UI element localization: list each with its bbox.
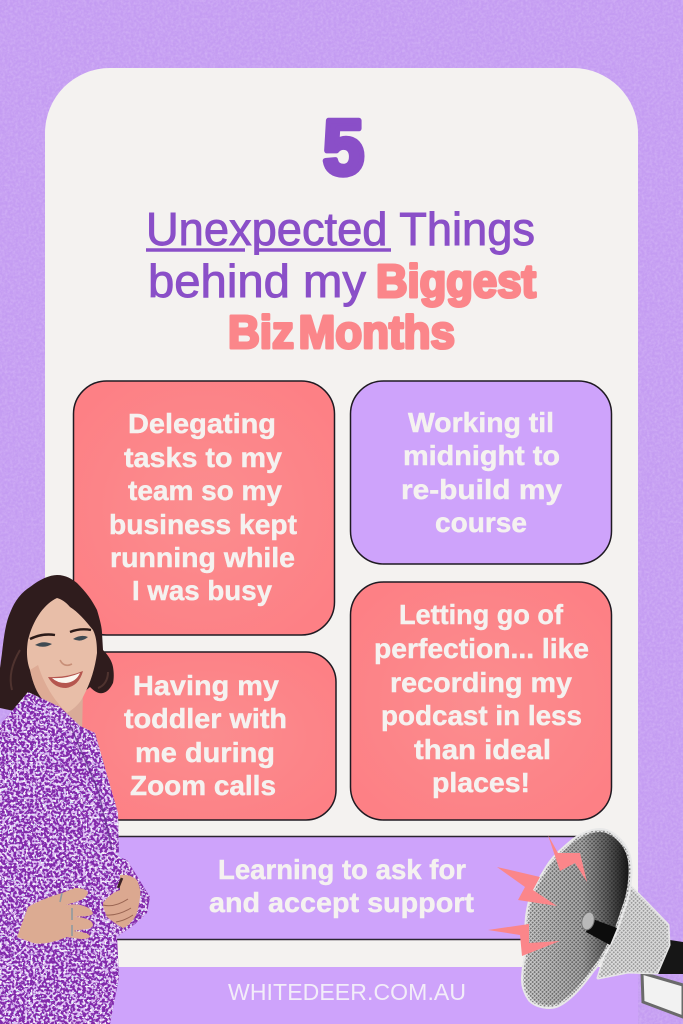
megaphone bell — [523, 830, 631, 1007]
megaphone driver — [586, 918, 617, 945]
face — [27, 598, 97, 713]
panel: delegating tasks: I was busy — [132, 575, 272, 606]
panel: letting go of perfection: places! — [432, 767, 530, 798]
panel: working til midnight: midnight to — [403, 440, 560, 471]
hair highlights — [11, 650, 108, 690]
panel: working til midnight: Working til — [408, 407, 554, 438]
title line 2: behind my — [148, 255, 366, 307]
nose — [60, 660, 72, 665]
sequin jacket — [0, 685, 155, 1024]
megaphone connector — [654, 940, 683, 974]
panel: ask for support banner: and accept support — [209, 887, 474, 918]
heading: big number 5: 5 — [323, 103, 364, 191]
panel: letting go of perfection: perfection... like — [374, 633, 589, 664]
halftone rear — [598, 884, 669, 978]
footer band with website: WHITEDEER.COM.AU — [228, 979, 466, 1005]
neck — [52, 690, 83, 745]
icon: megaphone — [523, 830, 683, 1017]
panel: toddler on zoom calls: Zoom calls — [130, 770, 276, 801]
smile — [48, 671, 83, 688]
panel: toddler on zoom calls: me during — [135, 737, 275, 768]
panel: delegating tasks: team so my — [128, 475, 282, 506]
panel: ask for support banner: Learning to ask for — [218, 854, 466, 885]
panel: letting go of perfection: recording my — [390, 667, 572, 698]
title highlight: Biggest: Biggest — [376, 255, 536, 307]
panel: letting go of perfection: than ideal — [414, 734, 551, 765]
lapel shadow — [70, 725, 112, 850]
halftone dots — [523, 830, 631, 1007]
panel: delegating tasks: tasks to my — [124, 442, 282, 473]
cheek shading — [30, 665, 67, 713]
footer band with website — [100, 967, 638, 1024]
teeth — [52, 673, 80, 683]
panel: delegating tasks: business kept — [109, 509, 297, 540]
megaphone rear cone — [598, 884, 669, 978]
hand left — [17, 888, 93, 944]
title — [146, 203, 536, 358]
panel: toddler on zoom calls: Having my — [133, 670, 279, 701]
panel: delegating tasks: Delegating — [128, 408, 276, 439]
eyes — [35, 636, 88, 647]
panel: letting go of perfection: podcast in less — [381, 700, 582, 731]
panel: working til midnight: course — [435, 507, 527, 538]
panel: toddler on zoom calls — [75, 652, 336, 820]
panel: letting go of perfection — [350, 582, 612, 820]
megaphone nub — [580, 911, 596, 931]
hand right — [103, 875, 140, 928]
title line 1: Unexpected Things — [146, 203, 535, 255]
panel: delegating tasks: running while — [110, 542, 295, 573]
panel: toddler on zoom calls: toddler with — [124, 703, 287, 734]
megaphone handle — [642, 973, 683, 1017]
panel: delegating tasks — [74, 381, 334, 635]
eyebrows — [30, 629, 91, 639]
panel: letting go of perfection: Letting go of — [399, 599, 564, 630]
icon: sound bolts — [488, 835, 587, 956]
panel: ask for support banner — [100, 836, 590, 940]
title highlight: Biz Months: Biz Months — [228, 306, 455, 358]
photo: smiling woman in sequin jacket — [0, 575, 155, 1024]
hair — [0, 575, 114, 712]
panel: working til midnight: re-build my — [401, 474, 562, 505]
title underline — [146, 248, 391, 252]
panel: working til midnight — [350, 381, 612, 564]
